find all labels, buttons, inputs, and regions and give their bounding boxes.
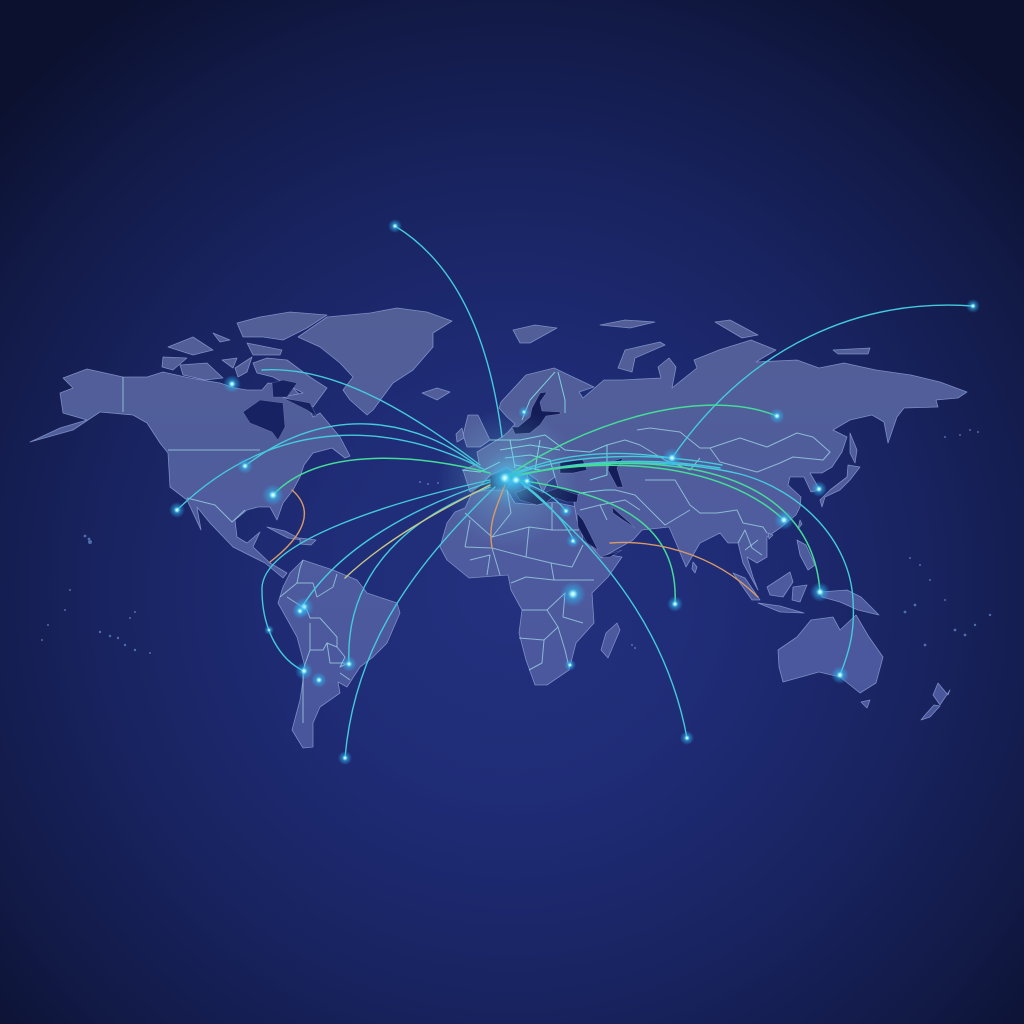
European borders: [462, 372, 615, 493]
Arctic Eurasian islands: [513, 320, 870, 372]
Mediterranean: [515, 487, 578, 505]
Canadian Arctic islands: [162, 312, 327, 407]
inland seas: [472, 392, 635, 557]
country borders: [123, 377, 830, 723]
Hudson Bay and Arctic straits: [243, 380, 317, 440]
Sakhalin and Japan: [820, 433, 860, 507]
New Zealand: [921, 683, 950, 720]
Tasmania: [861, 700, 870, 708]
South America: [278, 560, 400, 748]
destination glow points: [169, 219, 980, 765]
Gulf of Aden: [600, 550, 622, 557]
hub glow over Europe: [438, 408, 578, 548]
Iceland: [422, 388, 450, 400]
Black Sea: [560, 460, 587, 473]
Persian Gulf: [612, 507, 635, 528]
route arcs: cyan: [177, 226, 973, 758]
Southeast Asia islands: [692, 520, 879, 615]
Red Sea: [577, 513, 598, 550]
Baltic Sea: [512, 392, 560, 434]
route arcs: orange: [270, 485, 758, 597]
Caspian Sea: [608, 458, 623, 487]
Africa: [440, 490, 622, 685]
Madagascar: [601, 623, 620, 658]
route arcs: green: [273, 405, 820, 604]
North America: [30, 369, 350, 578]
Australia: [778, 615, 883, 693]
Britain and Ireland: [456, 415, 490, 447]
Greenland: [298, 308, 452, 415]
Cuba and Caribbean: [267, 527, 316, 545]
Pacific and Indian Ocean island specks: [41, 429, 991, 654]
world map landmasses: [30, 308, 967, 748]
Eurasia: [463, 340, 967, 590]
